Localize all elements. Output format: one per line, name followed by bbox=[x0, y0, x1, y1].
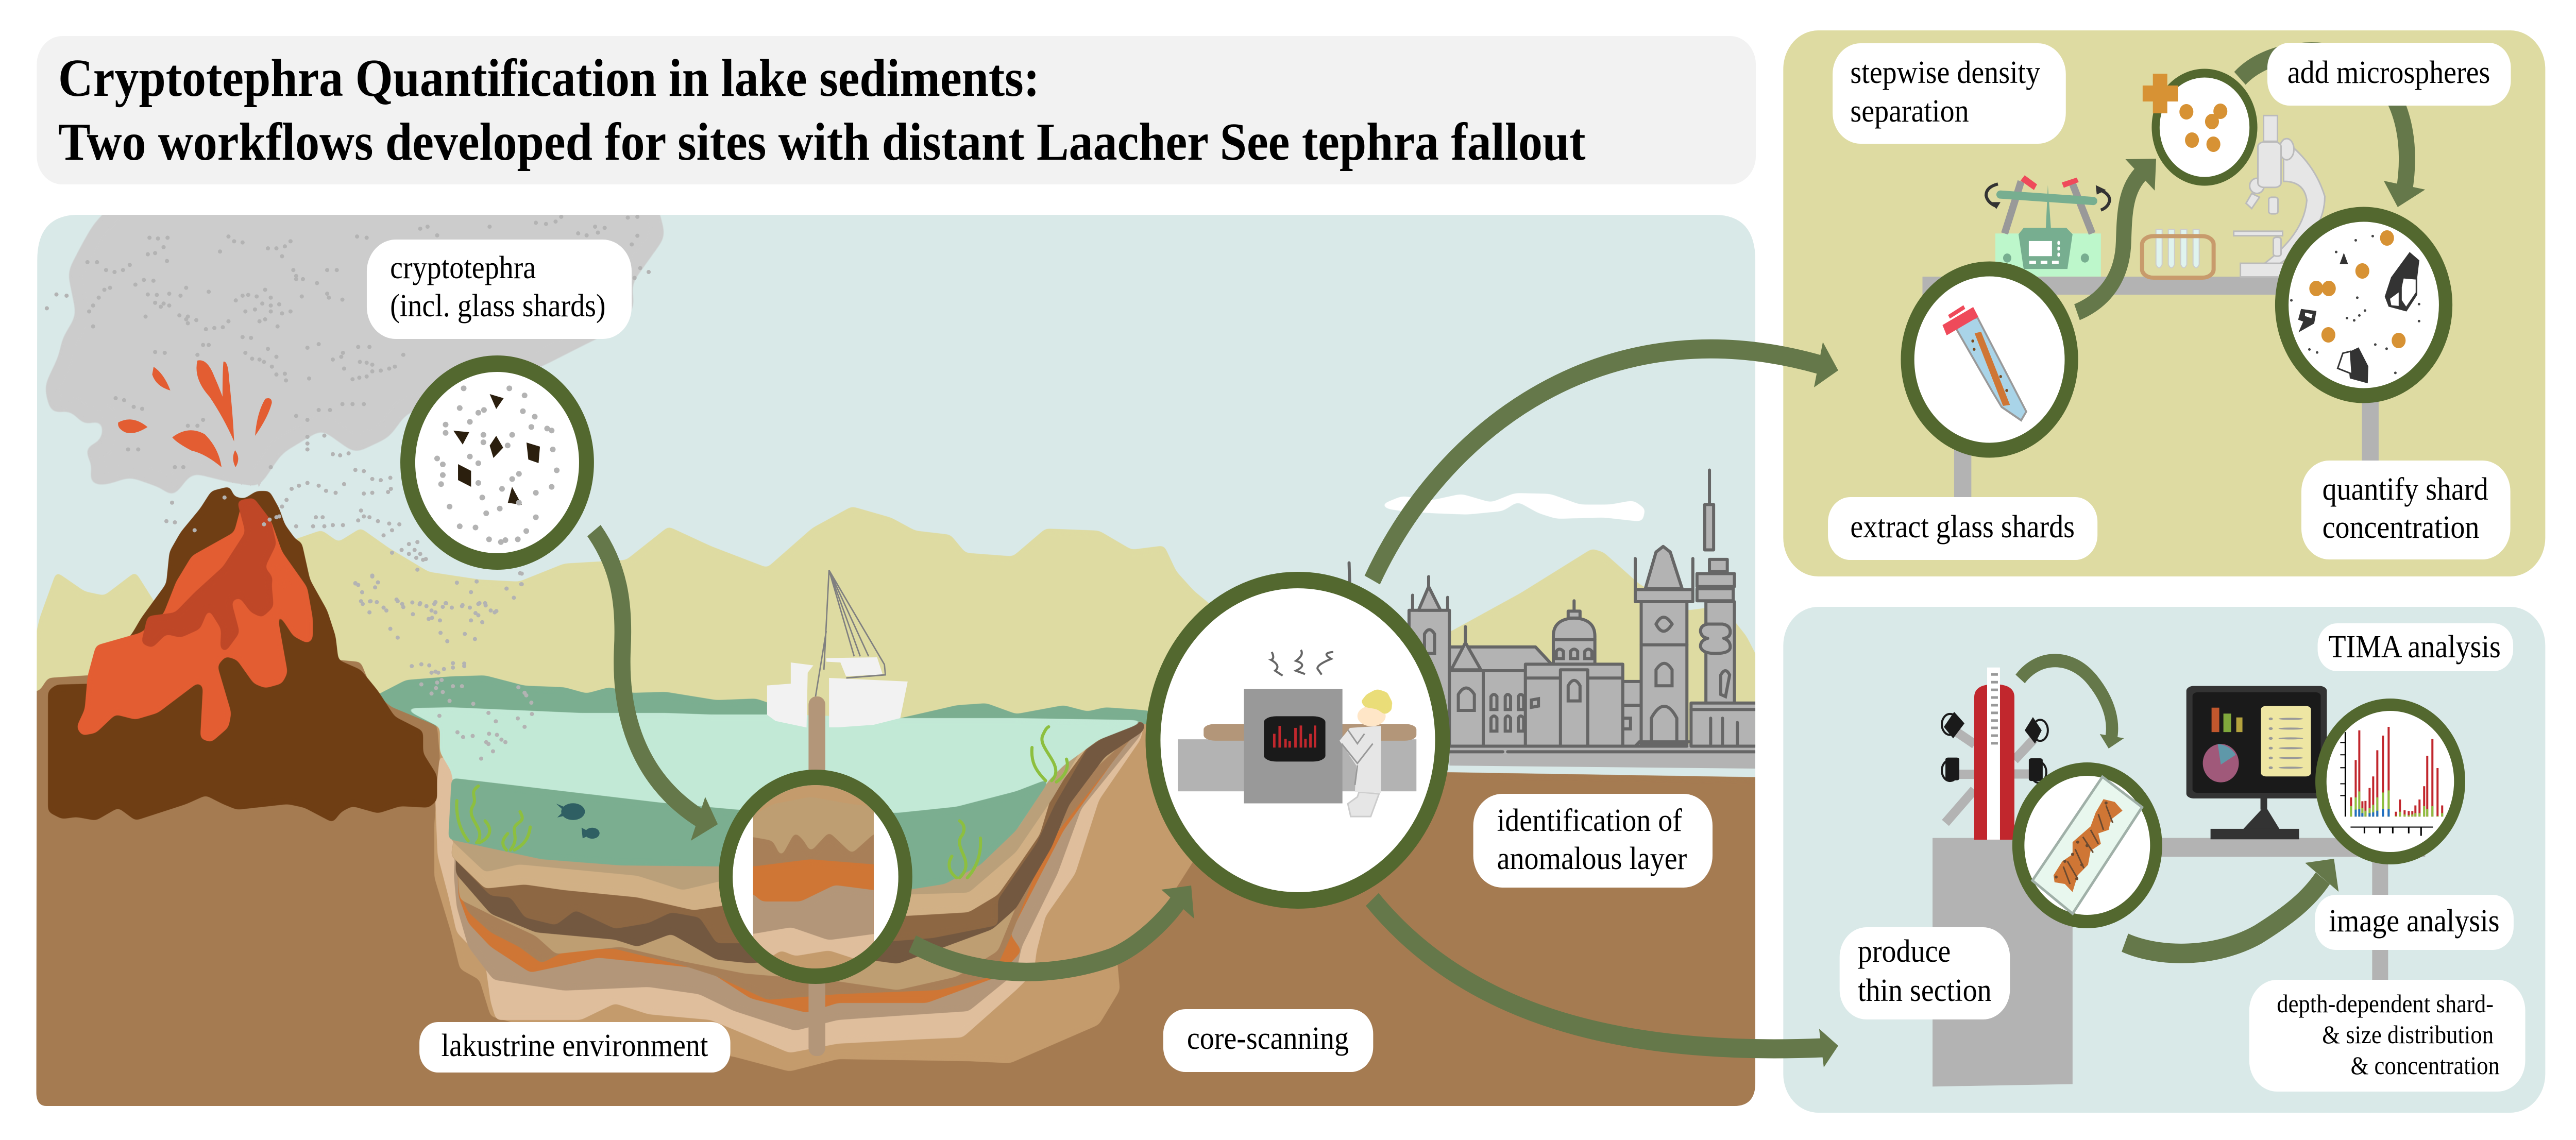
volcano bbox=[48, 486, 437, 823]
circle: thin section slide bbox=[2019, 769, 2156, 922]
label: extract glass shards: extract glass shards bbox=[1850, 508, 2075, 545]
title banner bbox=[37, 36, 1756, 184]
ash particles bbox=[47, 217, 649, 759]
computer monitor bbox=[2187, 686, 2327, 839]
arrow: scanner to thin section workflow bbox=[1372, 899, 1838, 1067]
circle: core sample bbox=[726, 773, 905, 1005]
seaweed bbox=[456, 727, 1067, 878]
circle: quantify concentration bbox=[2282, 214, 2446, 396]
circle: extract glass shards bbox=[1908, 269, 2072, 450]
label: depth-dependent distribution: & size distribution bbox=[2322, 1021, 2494, 1049]
label: identification of anomalous layer: anomalous layer bbox=[1497, 840, 1687, 876]
label: cryptotephra: cryptotephra bbox=[390, 249, 536, 285]
arrow: core to scanner bbox=[912, 886, 1194, 972]
shaker bbox=[1986, 175, 2110, 277]
fish bbox=[556, 803, 600, 839]
lava bombs and plume base bbox=[118, 360, 272, 487]
technician bbox=[1340, 689, 1392, 816]
ash cloud bbox=[44, 203, 666, 499]
circle: core scanner bbox=[1153, 580, 1443, 900]
city skyline bbox=[1349, 470, 1762, 769]
label: TIMA analysis: TIMA analysis bbox=[2328, 628, 2501, 665]
arrow: curved to thin section bbox=[2020, 660, 2124, 748]
bench bbox=[1922, 277, 2379, 500]
label: quantify shard concentration: concentration bbox=[2323, 509, 2479, 545]
label: stepwise density separation: stepwise density bbox=[1850, 54, 2041, 90]
lava flow bbox=[76, 499, 313, 742]
label: add microspheres: add microspheres bbox=[2287, 54, 2490, 90]
panel: density separation workflow bbox=[1783, 30, 2545, 576]
label: depth-dependent distribution: depth-dependent shard- bbox=[2277, 990, 2494, 1018]
arrow: cryptotephra to core bbox=[594, 531, 718, 841]
white cloud bbox=[1381, 493, 1646, 522]
circle: add microspheres bbox=[2143, 73, 2253, 181]
panel: lake landscape bbox=[23, 203, 1769, 1128]
label: produce thin section bbox=[1840, 927, 2010, 1019]
label: depth-dependent distribution: & concentration bbox=[2351, 1052, 2500, 1080]
label: identification of anomalous layer bbox=[1473, 794, 1713, 888]
microscope bbox=[2234, 115, 2325, 277]
title banner: Cryptotephra Quantification in lake sediments: bbox=[58, 49, 1040, 108]
circle: TIMA chart bbox=[2321, 705, 2460, 858]
label: core-scanning bbox=[1163, 1009, 1373, 1072]
label: add microspheres bbox=[2267, 43, 2511, 106]
label: cryptotephra bbox=[367, 240, 632, 339]
label: depth-dependent distribution bbox=[2249, 980, 2526, 1092]
test tube rack bbox=[2142, 229, 2214, 278]
bench bbox=[1933, 838, 2425, 1086]
panel: thin section workflow bbox=[1783, 607, 2545, 1113]
label: lakustrine environment: lakustrine environment bbox=[442, 1027, 708, 1063]
label: quantify shard concentration: quantify shard bbox=[2323, 471, 2488, 507]
label: image analysis bbox=[2315, 895, 2514, 950]
hills bbox=[28, 506, 1769, 747]
core pipe and ship bbox=[767, 570, 908, 1056]
arrow: microspheres to quantify bbox=[2240, 52, 2425, 207]
label: image analysis: image analysis bbox=[2329, 903, 2500, 939]
label: stepwise density separation: separation bbox=[1850, 93, 1969, 129]
arrow: scanner to density workflow bbox=[1372, 342, 1838, 580]
title banner: Two workflows developed for sites with distant Laacher See tephra fallout bbox=[58, 113, 1585, 172]
lake water bbox=[390, 702, 1149, 891]
label: lakustrine environment bbox=[419, 1022, 731, 1073]
far shore band bbox=[372, 675, 1155, 731]
label: TIMA analysis bbox=[2318, 623, 2513, 671]
arrow: to image analysis bbox=[2125, 859, 2338, 954]
label: stepwise density separation bbox=[1833, 43, 2066, 144]
label: core-scanning: core-scanning bbox=[1187, 1020, 1349, 1056]
label: produce thin section: produce bbox=[1858, 933, 1951, 969]
microtome bbox=[1942, 668, 2048, 840]
ground bbox=[23, 660, 1769, 1128]
sediment layers bbox=[434, 721, 1193, 1071]
label: identification of anomalous layer: identification of bbox=[1497, 802, 1682, 838]
label: produce thin section: thin section bbox=[1858, 972, 1992, 1008]
circle: cryptotephra shards bbox=[408, 364, 586, 562]
label: quantify shard concentration bbox=[2301, 461, 2511, 559]
arrow: to microspheres bbox=[2077, 159, 2156, 312]
label: cryptotephra: (incl. glass shards) bbox=[390, 287, 606, 324]
label: extract glass shards bbox=[1828, 497, 2097, 560]
